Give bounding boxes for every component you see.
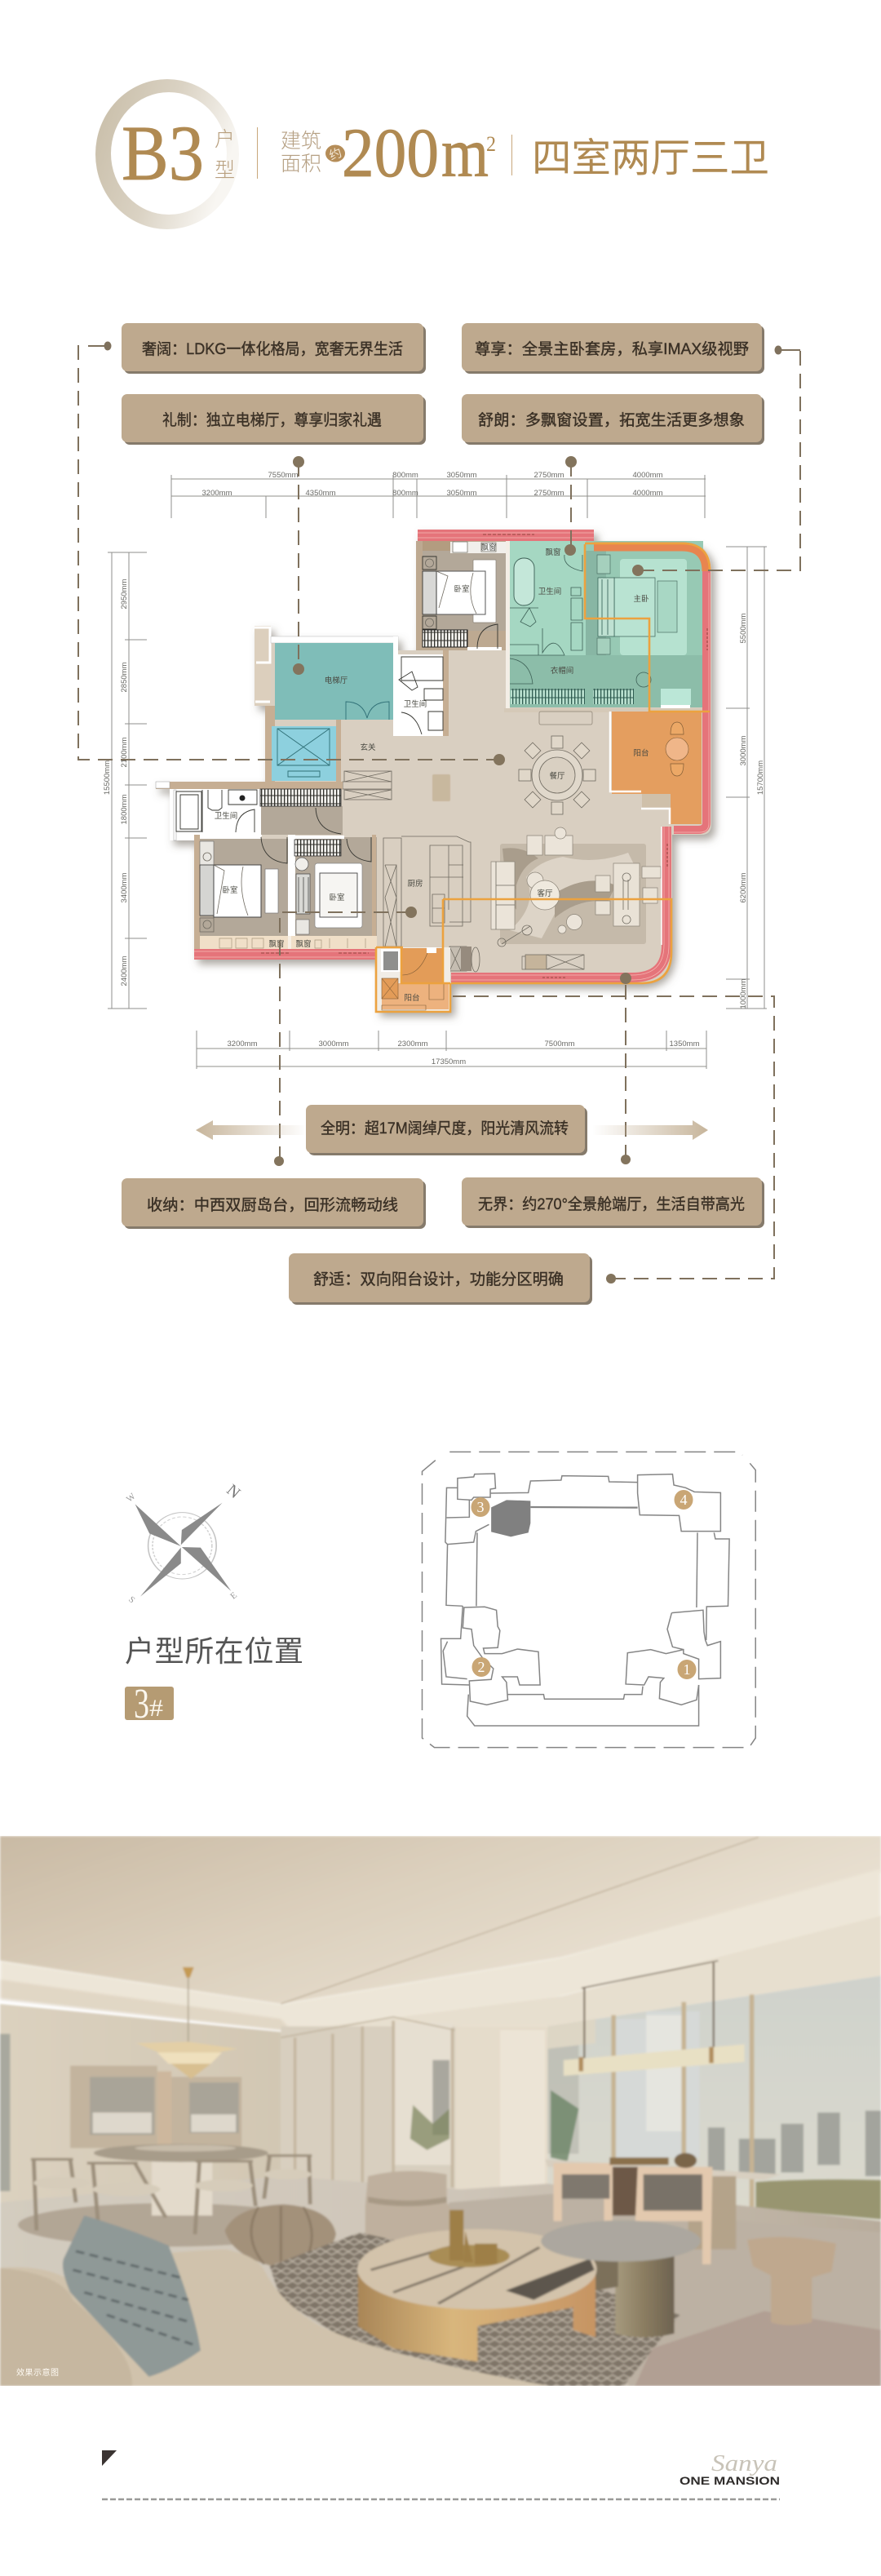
room: elevator hall: [255, 626, 398, 782]
wardrobe: [260, 789, 343, 835]
bottom dimension lines: 17350mm: [432, 1057, 466, 1066]
room: living: 客厅: [537, 889, 553, 898]
panel: floor plan: [156, 530, 711, 1012]
number: 200 m²: m: [441, 113, 489, 192]
floor: [0, 2176, 881, 2386]
top dimension lines: 3200mm: [202, 489, 232, 498]
ceiling: [0, 1836, 881, 2004]
marker 3: 3: [476, 1499, 485, 1515]
top dimension lines: 800mm: [392, 489, 418, 498]
marker 1: [677, 1660, 697, 1679]
round rug: [18, 2203, 256, 2247]
left dimension lines: 15500mm: [103, 760, 112, 795]
connector: left dashed line from luxury callout to dining: [78, 341, 505, 765]
right dimension lines: 3000mm: [739, 735, 748, 765]
left dimension lines: 2850mm: [120, 662, 129, 692]
room: kitchen: [383, 836, 480, 972]
room: balcony east: [610, 712, 702, 824]
heading: B3 unit type: 户: [215, 128, 235, 151]
site map: [422, 1452, 755, 1748]
marker 1: 1: [684, 1661, 690, 1678]
top dimension lines: 4000mm: [633, 489, 663, 498]
number: 200 m²: 2: [486, 132, 496, 156]
room: master suite: 卫生间: [538, 587, 561, 596]
left dimension lines: 2100mm: [120, 737, 129, 767]
arrow: left: [196, 1120, 307, 1140]
room: guest bathroom: [398, 650, 449, 736]
marble coffee table: [357, 2210, 597, 2361]
marker 3: [471, 1497, 489, 1517]
pillow: [63, 2215, 201, 2377]
caption: 效果示意图: [16, 2367, 59, 2378]
room: master suite: 飘窗: [545, 548, 561, 557]
room: elevator hall: 电梯厅: [325, 676, 348, 685]
dining chairs: [31, 2156, 312, 2234]
callout: 尊享: [462, 323, 764, 374]
bottom dimension lines: 3000mm: [319, 1040, 349, 1049]
room: kitchen: 厨房: [407, 879, 423, 889]
left dimension lines: 2400mm: [120, 955, 129, 986]
bottom dimension lines: [197, 1031, 706, 1069]
bay windows south: 飘窗: [295, 939, 312, 949]
text: building area: 面积: [281, 153, 321, 175]
top dimension lines: 4350mm: [306, 489, 336, 498]
room: secondary bathroom: [156, 782, 343, 840]
interior rendering: [0, 1836, 881, 2386]
top dimension lines: [171, 471, 706, 518]
room: left bedroom: 卧室: [222, 885, 238, 895]
left dimension lines: 2950mm: [120, 579, 129, 609]
room: left bedroom: [194, 835, 288, 949]
room: dining: [432, 712, 595, 814]
callout: 全明: [306, 1105, 587, 1155]
room: living: [491, 827, 661, 969]
side table top: [541, 2220, 701, 2262]
right dimension lines: 15700mm: [756, 760, 765, 795]
connector: comfort to balcony: [453, 996, 774, 1284]
left window strip: [0, 2034, 10, 2191]
badge: building 3: [125, 1681, 174, 1727]
stool: [747, 2237, 836, 2325]
callout: 舒朗: [462, 394, 764, 445]
bottom dimension lines: 7500mm: [545, 1040, 575, 1049]
badge: building 3: 3: [134, 1681, 149, 1727]
dining table: [152, 2154, 212, 2215]
room: guest bathroom: 卫生间: [404, 699, 427, 709]
callout: 舒适: [289, 1253, 592, 1305]
marker 4: [674, 1490, 693, 1510]
right dimension lines: [726, 547, 767, 1009]
title header: [95, 79, 769, 229]
top dimension lines: 4000mm: [633, 471, 663, 480]
icon: compass: W: [125, 1491, 138, 1505]
left dimension lines: [103, 552, 147, 1009]
top dimension lines: 2750mm: [534, 489, 564, 498]
callout: 收纳: [122, 1178, 426, 1229]
linear lamp: [564, 1961, 745, 2076]
heading: B3 unit type: B3: [122, 109, 204, 197]
pendant lamp: [136, 1967, 237, 2079]
bay windows south: [200, 936, 377, 949]
icon: compass: N: [223, 1481, 244, 1502]
right dimension lines: 5500mm: [739, 613, 748, 643]
marker 2: [471, 1657, 491, 1677]
left dimension lines: 3400mm: [120, 872, 129, 902]
pillar curtain: [455, 2026, 548, 2191]
divider: [511, 135, 512, 175]
room: entrance: [343, 743, 392, 800]
marker 4: 4: [680, 1492, 687, 1508]
footer: [102, 2450, 780, 2499]
glass partition: [281, 2026, 461, 2191]
brand logo: ONE MANSION: [680, 2474, 780, 2487]
window: [548, 1975, 881, 2221]
callout: 全明: 全明：超17M阔绰尺度，阳光清风流转: [321, 1120, 569, 1137]
callout: 奢阔: 奢阔：LDKG一体化格局，宽奢无界生活: [142, 340, 403, 358]
number: 200 m²: 200: [342, 113, 439, 192]
room: top bedroom: 飘窗: [480, 543, 497, 552]
number: 200 m²: [342, 113, 496, 192]
room: dining: 餐厅: [549, 771, 565, 781]
room: top bedroom: 卧室: [454, 584, 470, 594]
callout: 舒适: 舒适：双向阳台设计，功能分区明确: [313, 1270, 564, 1288]
room: entrance: 玄关: [360, 743, 376, 752]
room: balcony south: 阳台: [404, 993, 420, 1003]
bottom dimension lines: 2300mm: [398, 1040, 428, 1049]
callout: 无界: [462, 1177, 764, 1228]
right dimension lines: 1000mm: [739, 978, 748, 1009]
room: secondary bathroom: 卫生间: [215, 811, 237, 821]
connector: elevator hall: [293, 456, 304, 675]
connector: right dashed line from master suite callout: [632, 346, 800, 576]
icon: compass: S: [126, 1594, 137, 1605]
brand logo: Sanya: [711, 2451, 777, 2476]
wall strips: [194, 530, 709, 980]
callout: 无界: 无界：约270°全景舱端厅，生活自带高光: [478, 1195, 745, 1213]
bay windows south: 飘窗: [268, 939, 285, 949]
arrow: right: [592, 1120, 708, 1140]
divider: [257, 127, 258, 179]
back wall: [0, 2004, 281, 2202]
room: top bedroom: [416, 541, 507, 650]
bottom dimension lines: 3200mm: [228, 1040, 258, 1049]
floor base: [156, 530, 711, 1012]
gold outlines: [376, 543, 710, 1012]
room: master suite: 衣帽间: [551, 666, 573, 676]
callout: 收纳: 收纳：中西双厨岛台，回形流畅动线: [147, 1196, 398, 1214]
icon: compass: E: [228, 1590, 239, 1602]
room: right bedroom: 卧室: [329, 893, 345, 902]
callout: 奢阔: [122, 323, 426, 374]
connector: panoramic living: [620, 973, 631, 1164]
icon: about badge: 约: [328, 146, 343, 163]
brand logo: [680, 2451, 780, 2487]
connector: bay window: [564, 456, 577, 556]
top dimension lines: 7550mm: [268, 471, 299, 480]
badge: building 3: #: [149, 1695, 163, 1722]
bottom dimension lines: 1350mm: [670, 1040, 700, 1049]
right dimension lines: 6200mm: [739, 872, 748, 902]
icon: compass: [125, 1481, 244, 1605]
callout: 舒朗: 舒朗：多飘窗设置，拓宽生活更多想象: [478, 411, 745, 429]
tea table: [545, 2153, 781, 2264]
text: layout: 四室两厅三卫: [532, 136, 769, 180]
room: master suite: [504, 541, 703, 712]
room: balcony south: [376, 947, 450, 1012]
cabinets: [70, 2066, 241, 2148]
top dimension lines: 3050mm: [447, 471, 477, 480]
callout: 礼制: 礼制：独立电梯厅，尊享归家礼遇: [162, 411, 382, 429]
icon: ring badge: [95, 79, 239, 229]
heading: B3 unit type: 型: [215, 159, 235, 182]
logo mark: [102, 2450, 117, 2466]
room: master suite: 主卧: [633, 594, 649, 604]
top dimension lines: 800mm: [392, 471, 418, 480]
sofa chair: [365, 2171, 452, 2246]
side table: [594, 2255, 675, 2339]
connector: storage to kitchen: [274, 907, 417, 1166]
pouf: [225, 2204, 336, 2268]
patterned rug: [270, 2232, 680, 2386]
top dimension lines: 3050mm: [447, 489, 477, 498]
top dimension lines: 2750mm: [534, 471, 564, 480]
text: building area: 建筑: [281, 130, 321, 153]
room: right bedroom: [288, 835, 377, 949]
wall header right: [360, 1916, 881, 2027]
left dimension lines: 1800mm: [120, 794, 129, 824]
callout: 礼制: [122, 394, 426, 445]
callout: 尊享: 尊享：全景主卧套房，私享IMAX级视野: [475, 340, 749, 358]
marker 2: 2: [478, 1659, 485, 1675]
cove: [0, 1869, 881, 2030]
heading: unit location: 户型所在位置: [125, 1634, 303, 1668]
room: balcony east: 阳台: [633, 748, 649, 758]
text: building area: [281, 130, 321, 175]
panel: floor plan dimensions: [103, 471, 767, 1069]
big sofa: [0, 2250, 551, 2386]
